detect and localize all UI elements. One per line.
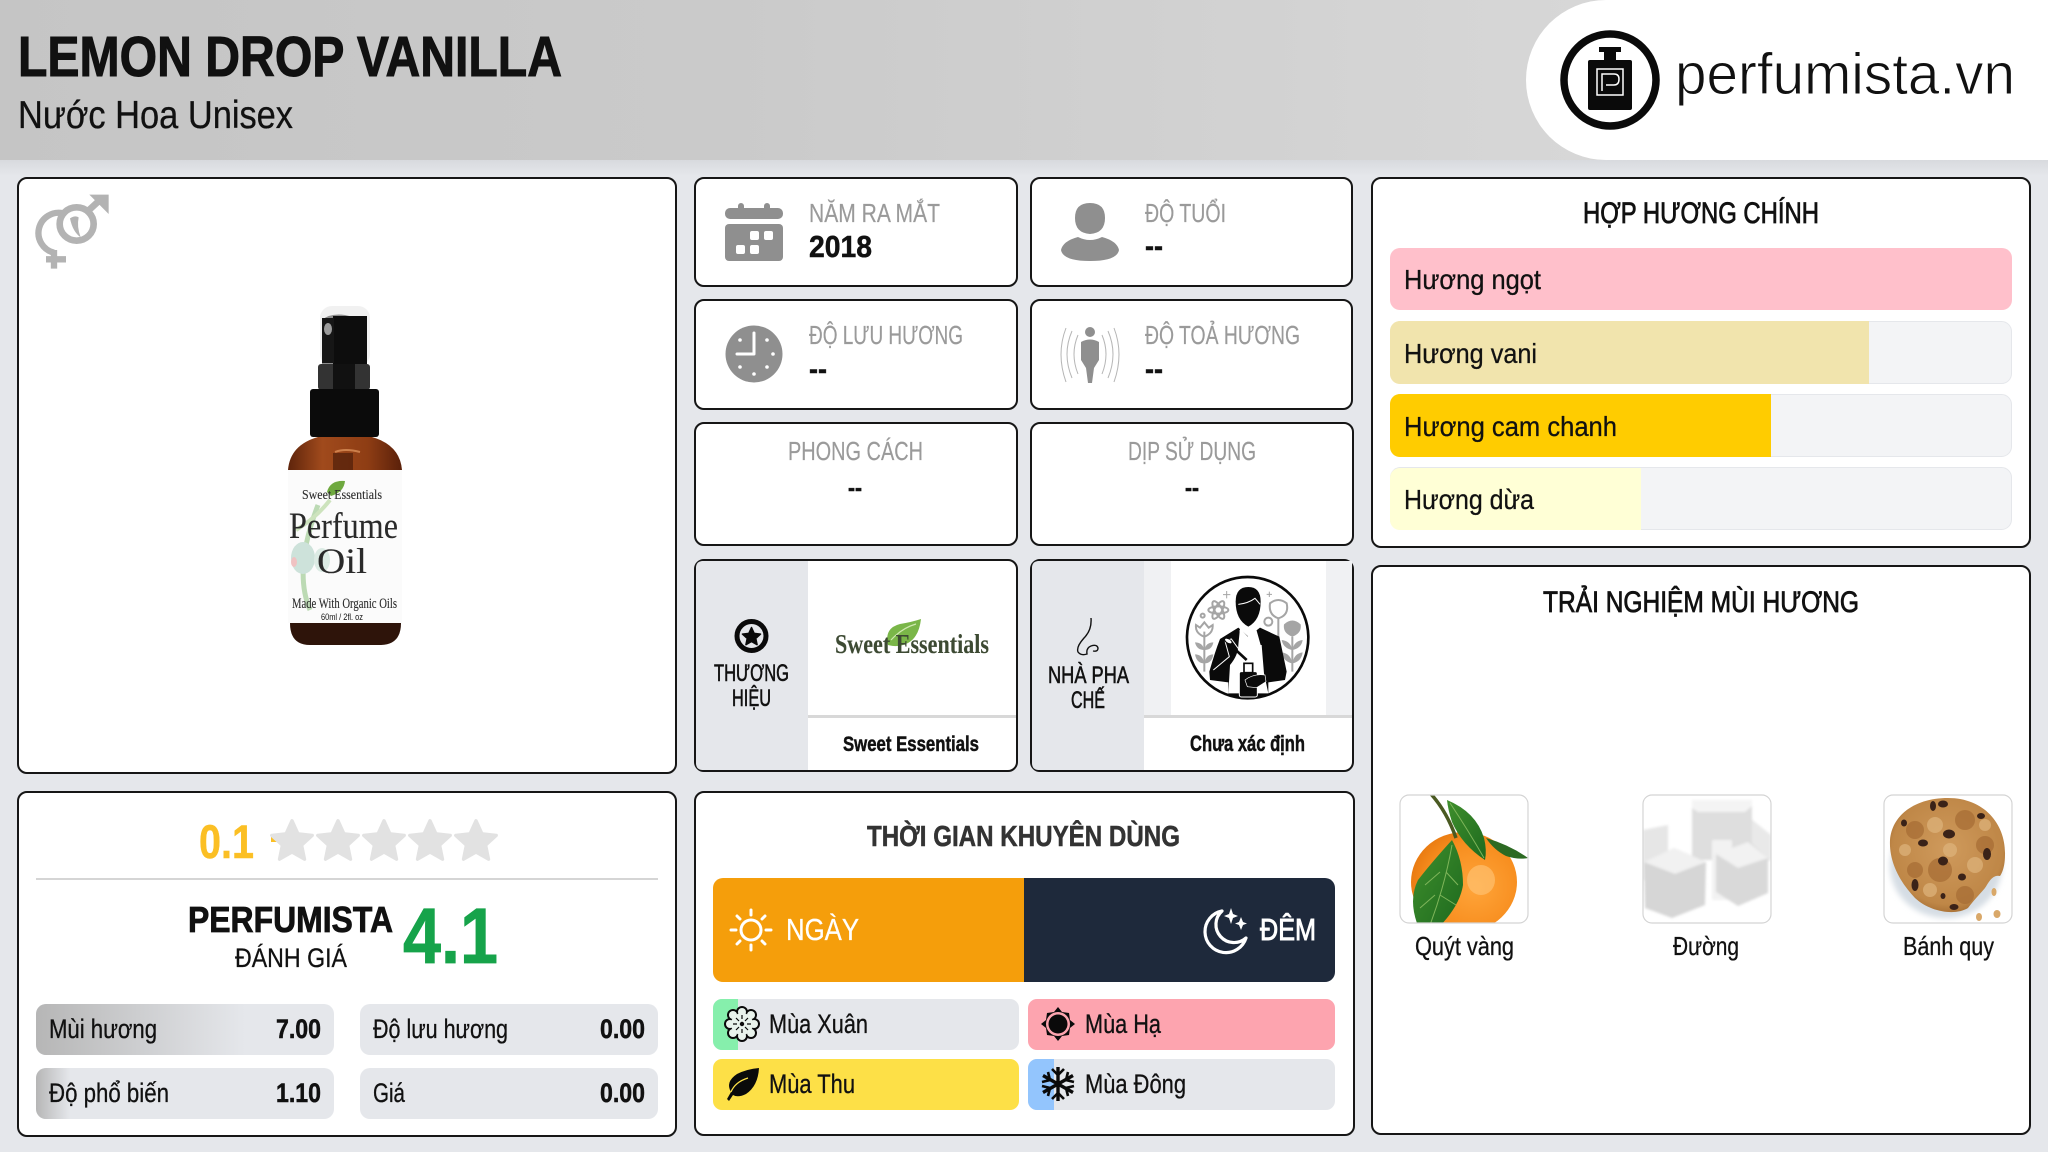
panel: ratings: [18, 792, 676, 1136]
ingredient: cookie: [1884, 795, 2012, 923]
ingredient label: Quýt vàng: [1415, 931, 1514, 961]
stat: scent: 7.00: [276, 1014, 321, 1044]
label artwork: Sweet Essentials: [302, 488, 382, 503]
label: ĐỘ TOẢ HƯƠNG: [1145, 320, 1300, 350]
brand logo: [835, 619, 989, 659]
stat: price: 0.00: [600, 1078, 645, 1108]
subtitle: Nước Hoa Unisex: [18, 94, 293, 137]
icon: star badge: [737, 622, 766, 650]
season: autumn: Mùa Thu: [769, 1069, 855, 1099]
title: LEMON DROP VANILLA: [18, 25, 562, 89]
ingredient: mandarin: [1400, 794, 1528, 932]
label artwork: 60ml / 2fl. oz: [321, 612, 363, 622]
label artwork: Oil: [317, 541, 367, 581]
season: summer: [1028, 999, 1335, 1050]
perfumer illustration: [1187, 577, 1308, 698]
botanical decoration: [1196, 591, 1292, 672]
value: --: [809, 353, 827, 386]
icon: person: [1061, 203, 1119, 261]
card: projection: [1031, 300, 1352, 409]
user score: 0.1: [199, 815, 254, 868]
label: NHÀ PHA: [1048, 662, 1129, 689]
label artwork: Made With Organic Oils: [292, 596, 397, 612]
stat: price: Giá: [373, 1078, 406, 1108]
day segment: NGÀY: [786, 912, 859, 947]
ingredient label: Bánh quy: [1903, 931, 1994, 961]
card: brand: [695, 560, 1017, 771]
stat: scent: [36, 1004, 334, 1055]
accord bar: citrus: Hương cam chanh: [1404, 411, 1617, 442]
stat: price: [360, 1068, 658, 1119]
perfumista label: PERFUMISTA: [188, 899, 393, 940]
value: --: [1145, 353, 1163, 386]
icon: body with scent waves: [1061, 327, 1119, 383]
accord bar: citrus: [1390, 394, 2012, 457]
perfumista label: [188, 899, 393, 973]
label: [714, 660, 789, 712]
night segment: [1024, 878, 1335, 982]
value: --: [1145, 230, 1163, 263]
stat: longevity: Độ lưu hương: [373, 1014, 508, 1044]
icon: unisex gender symbol: [38, 195, 109, 269]
label artwork: [289, 481, 398, 622]
season: spring: Mùa Xuân: [769, 1009, 868, 1039]
day segment: [713, 878, 1024, 982]
heading: TRẢI NGHIỆM MÙI HƯƠNG: [1543, 585, 1859, 619]
brand logo: Sweet Essentials: [835, 629, 989, 659]
accord bar: vanilla: Hương vani: [1404, 338, 1537, 369]
label: CHẾ: [1071, 686, 1105, 714]
ingredient: sugar: [1643, 795, 1771, 923]
icon: moon and stars: [1205, 908, 1247, 953]
icon: flower: [724, 1006, 760, 1042]
icon: sun: [731, 910, 771, 950]
panel: scent experience: [1372, 566, 2030, 1134]
card: age: [1031, 178, 1352, 286]
perfumista score: 4.1: [403, 891, 498, 980]
perfumista label: ĐÁNH GIÁ: [235, 943, 347, 973]
card: perfumer: [1031, 560, 1353, 771]
label: [1048, 662, 1129, 714]
season: autumn: [713, 1059, 1019, 1110]
brand name: Sweet Essentials: [843, 733, 979, 756]
panel: main accords: [1372, 178, 2030, 547]
stat: scent: Mùi hương: [49, 1014, 157, 1044]
logo tab: [1526, 0, 2048, 160]
season: winter: Mùa Đông: [1085, 1069, 1186, 1099]
card: occasion: [1031, 423, 1353, 545]
product bottle photo: [288, 306, 402, 645]
stat: longevity: 0.00: [600, 1014, 645, 1044]
header bar: [0, 0, 2048, 160]
panel: product image: [18, 178, 676, 773]
label: NĂM RA MẮT: [809, 198, 940, 228]
value: --: [848, 475, 862, 502]
accord bar: sweet: [1390, 248, 2012, 310]
stat: longevity: [360, 1004, 658, 1055]
heading: THỜI GIAN KHUYÊN DÙNG: [867, 819, 1180, 853]
value: --: [1185, 475, 1199, 502]
label: ĐỘ LƯU HƯƠNG: [809, 320, 963, 350]
star rating: [271, 821, 496, 859]
accord bar: coconut: Hương dừa: [1404, 484, 1534, 515]
ingredient label: Đường: [1673, 931, 1739, 961]
icon: perfume bottle logo: [1564, 34, 1656, 126]
accord bar: sweet: Hương ngọt: [1404, 264, 1541, 295]
stat: popularity: 1.10: [276, 1078, 321, 1108]
season: winter: [1028, 1059, 1335, 1110]
value: 2018: [809, 229, 872, 264]
label: HIỆU: [732, 685, 771, 712]
heading: HỢP HƯƠNG CHÍNH: [1583, 197, 1819, 230]
night segment: ĐÊM: [1260, 912, 1316, 947]
icon: black sun: [1041, 1007, 1075, 1041]
icon: leaf: [727, 1068, 759, 1101]
label: DỊP SỬ DỤNG: [1128, 435, 1256, 466]
stat: popularity: [36, 1068, 334, 1119]
perfumer name: Chưa xác định: [1190, 731, 1305, 756]
icon: calendar: [725, 203, 783, 261]
accord bar: vanilla: [1390, 321, 2012, 384]
label: PHONG CÁCH: [788, 436, 923, 466]
season: spring: [713, 999, 1019, 1050]
icon: nose: [1078, 618, 1098, 655]
season: summer: Mùa Hạ: [1085, 1009, 1162, 1039]
card: release year: [695, 178, 1017, 286]
card: style: [695, 423, 1017, 545]
stat: popularity: Độ phổ biến: [49, 1078, 169, 1108]
label: ĐỘ TUỔI: [1145, 198, 1226, 228]
panel: recommended time: [695, 792, 1354, 1135]
figure: [1236, 587, 1261, 627]
accord bar: coconut: [1390, 468, 2012, 530]
card: longevity: [695, 300, 1017, 409]
logo wordmark: perfumista.vn: [1675, 42, 2015, 107]
icon: clock: [726, 326, 782, 382]
icon: snowflake: [1042, 1067, 1074, 1101]
label: THƯƠNG: [714, 660, 789, 687]
label artwork: Perfume: [289, 506, 398, 547]
